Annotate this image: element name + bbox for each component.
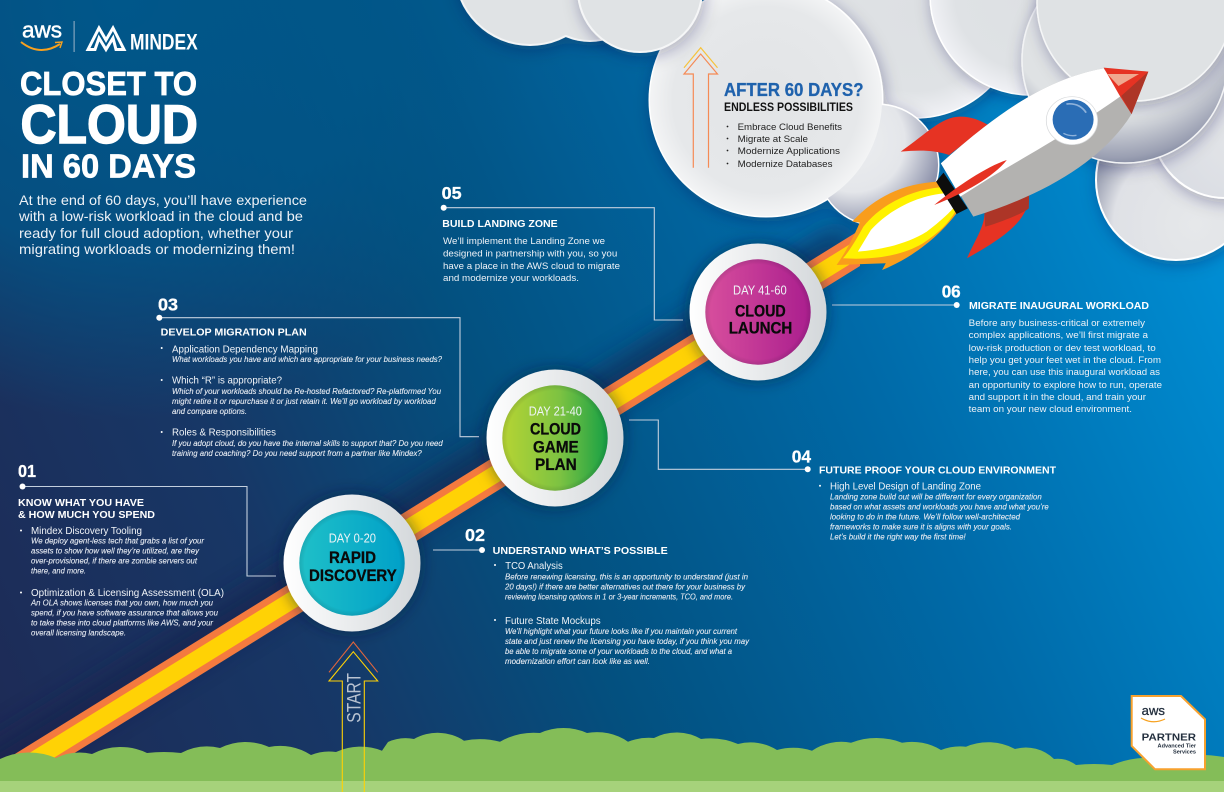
- step 03: training and coaching? Do you need support from a partner like Mindex?: [172, 449, 422, 458]
- step 05: BUILD LANDING ZONE: [442, 218, 558, 230]
- arrow: after 60 days: [684, 48, 718, 168]
- step 03: DEVELOP MIGRATION PLAN: [161, 327, 307, 339]
- step 03: Which “R” is appropriate?: [172, 376, 283, 387]
- step 01: to take these into cloud platforms like AWS, and your: [31, 619, 213, 628]
- step 02: reviewing licensing options in 1 or 3-year increments, TCO, and more.: [505, 592, 733, 601]
- ribbon shadow: [0, 225, 860, 792]
- step 03: [156, 295, 443, 458]
- after 60 days list: [727, 122, 842, 170]
- step 05: have a place in the AWS cloud to migrate: [443, 261, 620, 272]
- intro paragraph: At the end of 60 days, you’ll have experience: [19, 192, 307, 208]
- step 06: 06: [942, 281, 961, 301]
- step 04: frameworks to make sure it is aligns with your goals.: [830, 522, 1012, 531]
- step 06: and support it in the cloud, and train your: [969, 392, 1147, 403]
- step 01: assets to show how well they’re utilized, are they: [31, 546, 200, 555]
- step 04: High Level Design of Landing Zone: [830, 482, 982, 493]
- rocket nose: [1104, 68, 1148, 114]
- step 05: 05: [442, 183, 462, 203]
- step 01: [18, 461, 224, 638]
- aws partner badge: aws: [1142, 703, 1165, 718]
- step circle 1: RAPID: [329, 548, 376, 567]
- step 03: might retire it or repurchase it or just retain it. We’ll go workload by workload: [172, 397, 436, 406]
- step 01: An OLA shows licenses that you own, how much you: [30, 599, 214, 608]
- step 06: here, you can use this inaugural workload as: [969, 367, 1160, 378]
- title: CLOSET TO: [20, 66, 197, 103]
- step circle 1: [284, 494, 420, 632]
- aws partner badge: [1132, 696, 1205, 769]
- step 04: Landing zone build out will be different for every organization: [830, 492, 1042, 501]
- step 03: Which of your workloads should be Re-hosted Refactored? Re-platformed You: [172, 387, 442, 396]
- title: CLOUD: [20, 93, 198, 155]
- step 01: 01: [18, 461, 36, 481]
- clouds: main: [648, 0, 940, 226]
- mindex logo: [88, 28, 198, 54]
- step 03: Application Dependency Mapping: [172, 344, 318, 355]
- step 01: spend, if you have software assurance that allows you: [31, 609, 219, 618]
- step circle 3: CLOUD: [735, 302, 786, 321]
- step 05: [441, 183, 620, 284]
- step circle 2: GAME: [533, 437, 579, 456]
- after 60 days list: Embrace Cloud Benefits: [738, 122, 842, 133]
- title: [20, 66, 198, 184]
- clouds: top middle: [809, 0, 1130, 118]
- step 03: What workloads you have and which are appropriate for your business needs?: [172, 355, 443, 364]
- rocket window: [1046, 97, 1098, 145]
- after 60 days list: Modernize Applications: [738, 146, 840, 157]
- step 02: 20 days!) if there are better alternatives out there for your business by: [504, 582, 746, 591]
- step 01: Mindex Discovery Tooling: [31, 526, 142, 537]
- step circle 3: [690, 244, 826, 380]
- step 02: Future State Mockups: [505, 616, 601, 627]
- step 04: 04: [792, 446, 811, 466]
- clouds: right: [1022, 0, 1224, 260]
- rocket body: [936, 68, 1148, 217]
- after 60 days list: Modernize Databases: [738, 159, 833, 170]
- start arrow: START: [344, 673, 366, 723]
- step 03: If you adopt cloud, do you have the internal skills to support that? Do you need: [172, 439, 443, 448]
- step 05: We’ll implement the Landing Zone we: [443, 236, 605, 247]
- intro paragraph: [18, 192, 307, 257]
- step 02: be able to migrate some of your workloads to the cloud, and what a: [505, 647, 733, 656]
- logos: [21, 18, 198, 54]
- aws partner badge: Services: [1173, 749, 1196, 755]
- aws partner badge: PARTNER: [1142, 733, 1197, 744]
- step 06: Before any business-critical or extremely: [969, 318, 1145, 329]
- step 04: [792, 446, 1057, 541]
- step 06: complex applications, we’ll first migrate a: [969, 330, 1149, 341]
- step 01: We deploy agent-less tech that grabs a list of your: [31, 536, 204, 545]
- title: IN 60 DAYS: [21, 148, 196, 184]
- start arrow: [329, 642, 378, 792]
- connector lines: [22, 208, 957, 576]
- step circle 1: DISCOVERY: [309, 566, 397, 585]
- step 06: MIGRATE INAUGURAL WORKLOAD: [969, 300, 1149, 312]
- after 60 days list: Migrate at Scale: [738, 134, 808, 145]
- step 02: modernization effort can look like as well.: [505, 657, 650, 666]
- step 01: & HOW MUCH YOU SPEND: [18, 509, 155, 521]
- step 02: We’ll highlight what your future looks like if you maintain your current: [505, 627, 738, 636]
- step 04: looking to do in the future. We’ll follow well-architected: [830, 512, 1021, 521]
- step 04: FUTURE PROOF YOUR CLOUD ENVIRONMENT: [819, 464, 1057, 476]
- rocket: [837, 68, 1148, 270]
- step 02: UNDERSTAND WHAT’S POSSIBLE: [493, 545, 668, 557]
- step 01: overall licensing landscape.: [31, 629, 126, 638]
- step 06: help you get your feet wet in the cloud. From: [969, 355, 1161, 366]
- aws logo: aws: [22, 18, 62, 43]
- step circle 2: [486, 370, 624, 506]
- step 01: Optimization & Licensing Assessment (OLA): [31, 588, 224, 599]
- mindex logo: MINDEX: [130, 29, 198, 54]
- step 04: Let’s build it the right way the first time!: [830, 532, 966, 541]
- step 01: over-provisioned, if there are zombie servers out: [31, 556, 198, 565]
- step 01: KNOW WHAT YOU HAVE: [18, 497, 144, 509]
- step 06: [942, 281, 1162, 415]
- step 02: [465, 525, 750, 666]
- step 02: Before renewing licensing, this is an opportunity to understand (just in: [505, 572, 749, 581]
- step 06: low-risk production or dev test workload, to: [969, 343, 1156, 354]
- step circle 2: PLAN: [535, 455, 577, 474]
- step 01: there, and more.: [31, 566, 86, 575]
- intro paragraph: ready for full cloud adoption, whether your: [19, 225, 293, 241]
- step 03: Roles & Responsibilities: [172, 428, 276, 439]
- after 60 days text: ENDLESS POSSIBILITIES: [724, 100, 853, 114]
- grass: [0, 728, 1224, 792]
- after 60 days text: [724, 80, 864, 170]
- step 06: team on your new cloud environment.: [969, 404, 1132, 415]
- step circle 3: LAUNCH: [729, 318, 792, 337]
- aws partner badge: Advanced Tier: [1158, 744, 1197, 750]
- flame: [837, 182, 957, 270]
- ribbon path: [0, 230, 860, 792]
- step circle 2: DAY 21-40: [529, 403, 582, 418]
- clouds: top left: [454, 0, 702, 52]
- rocket fins: [901, 117, 1029, 258]
- step circle 3: DAY 41-60: [733, 283, 787, 298]
- step circle 1: DAY 0-20: [329, 531, 376, 546]
- step 03: and compare options.: [172, 407, 247, 416]
- step 02: TCO Analysis: [505, 561, 563, 572]
- step 04: based on what assets and workloads you have and what you’re: [830, 502, 1049, 511]
- step 02: 02: [465, 525, 485, 545]
- step circle 2: CLOUD: [530, 420, 581, 439]
- step 06: an opportunity to explore how to run, operate: [969, 380, 1162, 391]
- step 03: 03: [158, 295, 178, 315]
- step 02: state and just renew the licensing you have today, if you think you may: [505, 637, 750, 646]
- intro paragraph: migrating workloads or modernizing them!: [19, 241, 295, 257]
- step 05: and modernize your workloads.: [443, 273, 579, 284]
- rocket center fin: [934, 160, 1007, 205]
- intro paragraph: with a low-risk workload in the cloud and be: [18, 208, 303, 224]
- step 05: designed in partnership with you, so you: [443, 248, 617, 259]
- after 60 days text: AFTER 60 DAYS?: [724, 80, 864, 100]
